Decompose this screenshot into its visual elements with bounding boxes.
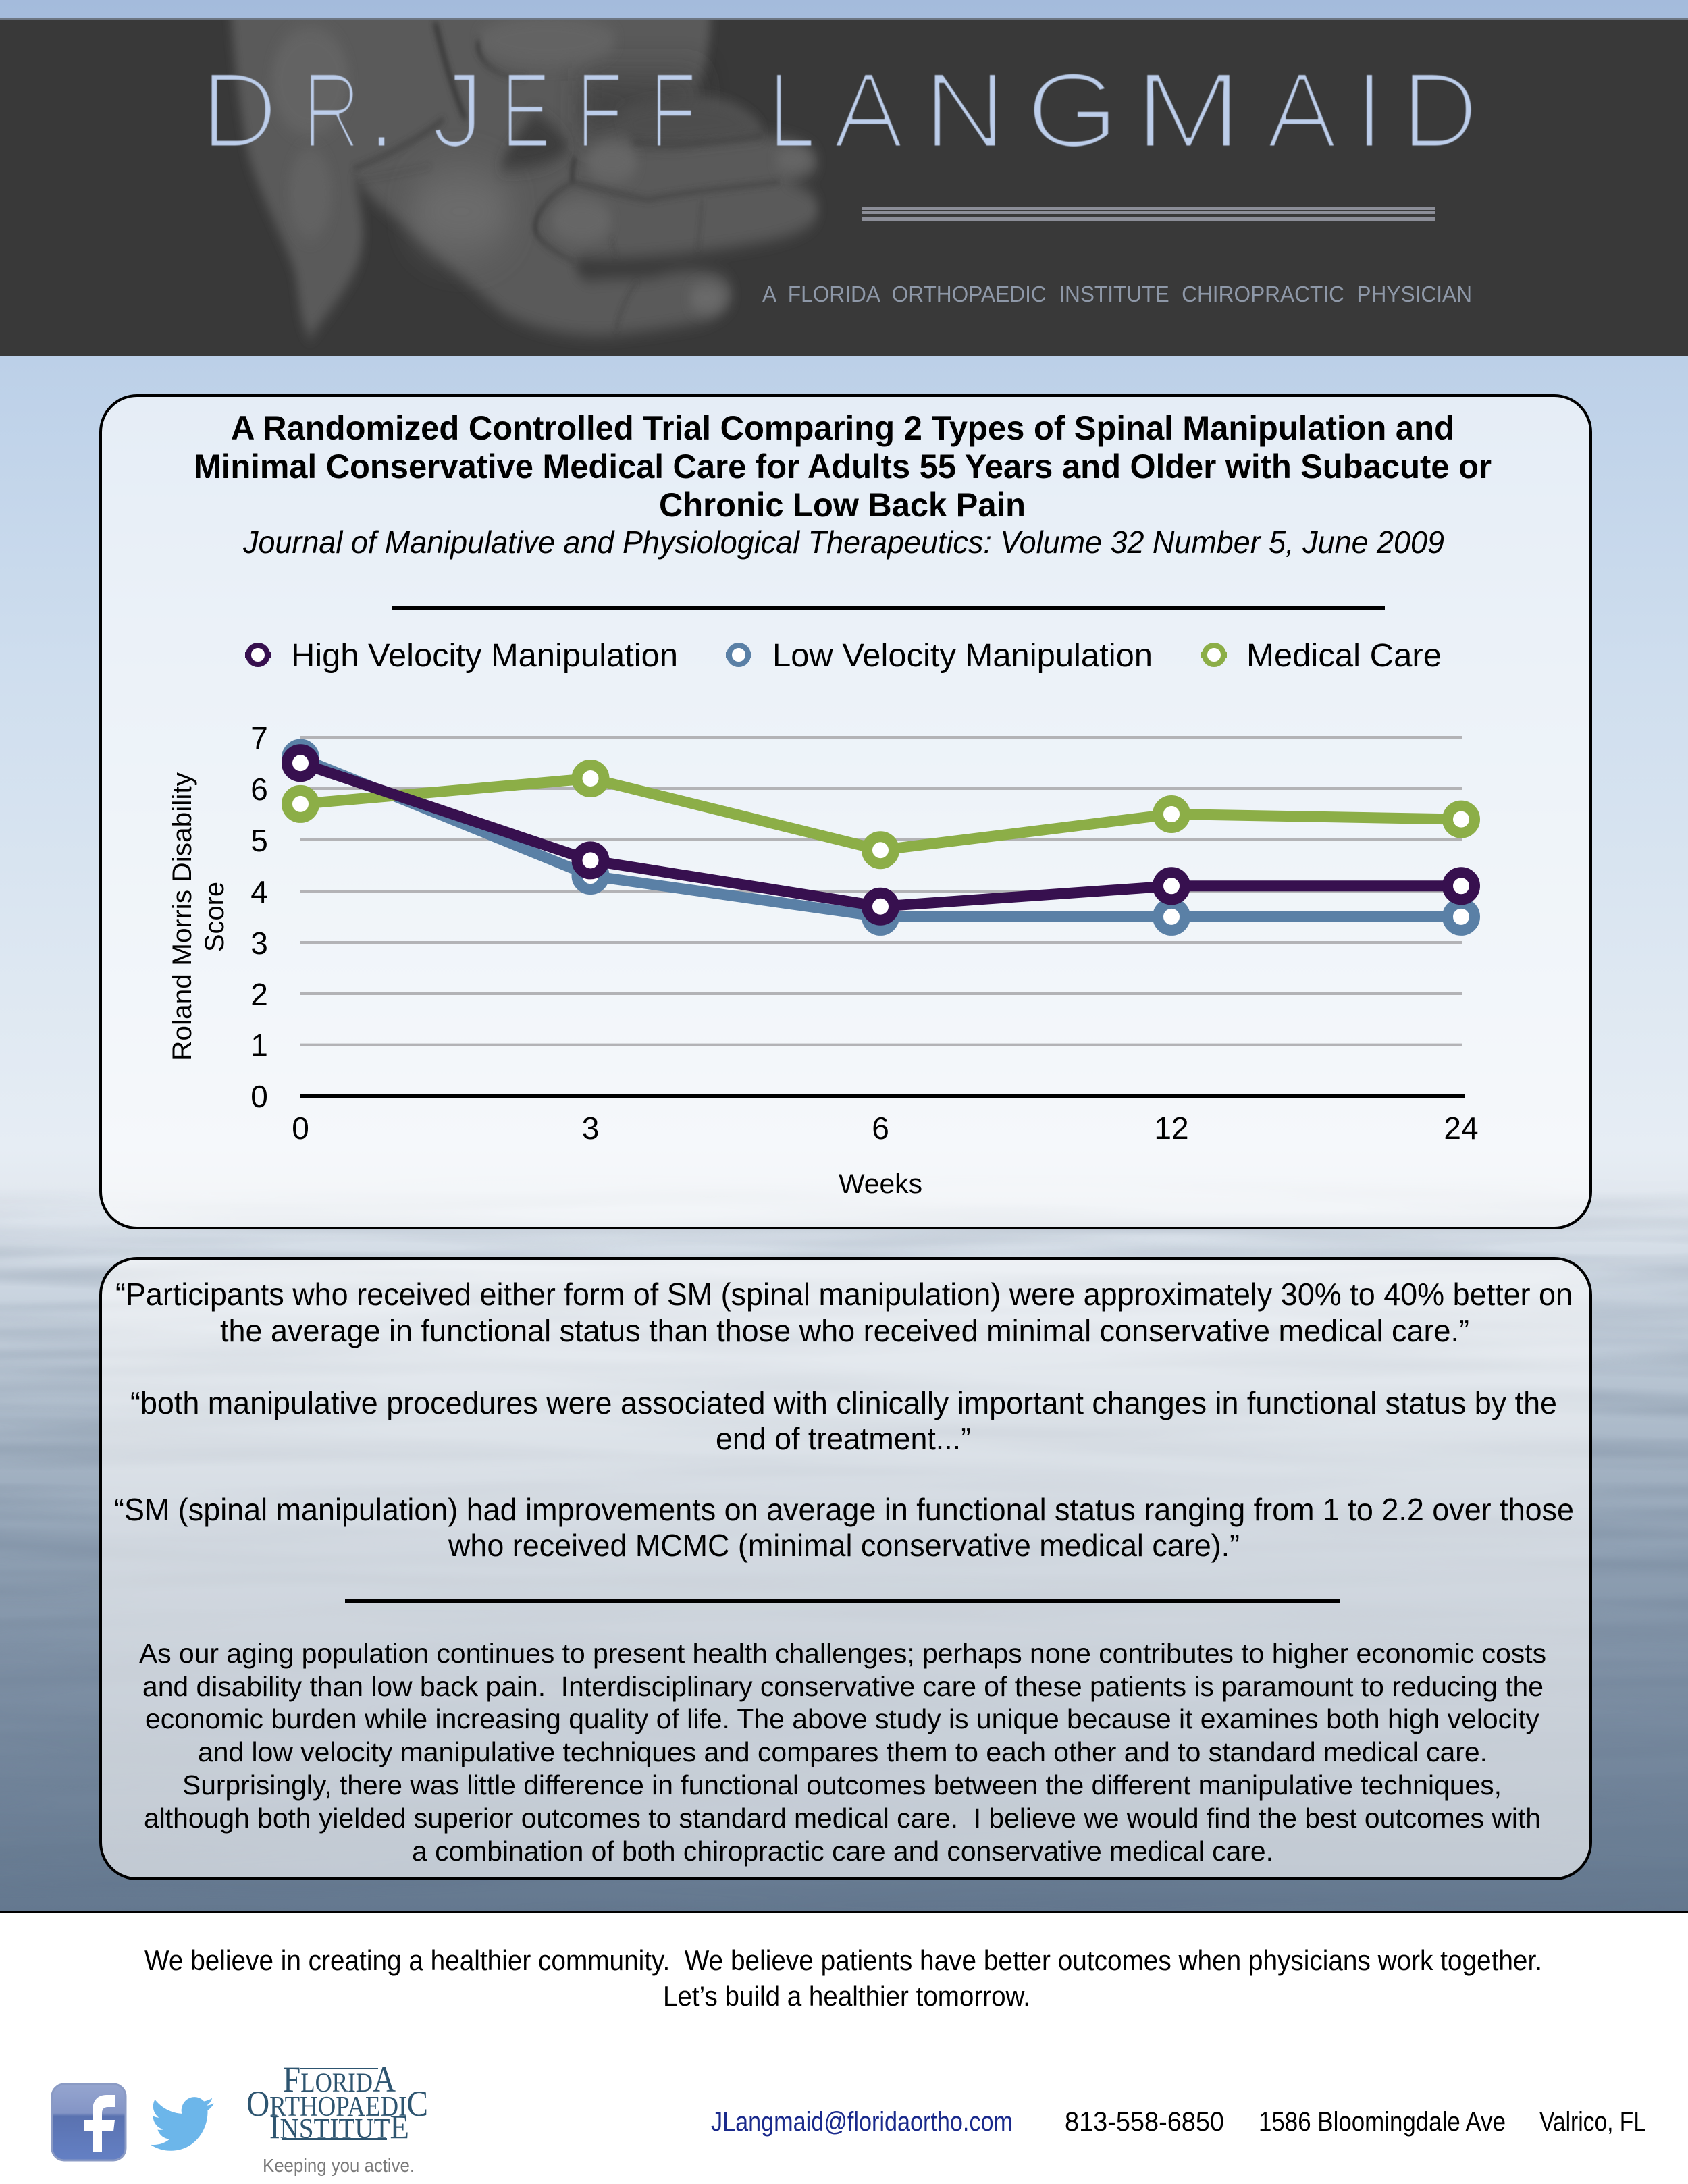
logo: Florida Orthopaedic Institute: ORTHOPAEDIC [246, 2083, 428, 2124]
study title: Chronic Low Back Pain [659, 486, 1026, 524]
header banner [0, 0, 1688, 356]
y axis labels [250, 720, 268, 1114]
study quotes: “Participants who received either form of SM (spinal manipulation) were approximately 30% to 40% better on [115, 1277, 1573, 1312]
author commentary: Surprisingly, there was little difference in functional outcomes between the different manipulative techniques, [182, 1769, 1502, 1801]
chart legend: Medical Care [1246, 638, 1442, 674]
banner name: F [575, 50, 624, 170]
y axis labels: 5 [250, 823, 268, 858]
chart legend: Low Velocity Manipulation [772, 638, 1153, 674]
series: medical care [287, 765, 1475, 863]
x axis labels: 24 [1444, 1111, 1479, 1146]
contact details: JLangmaid@floridaortho.com [711, 2107, 1013, 2137]
y axis title: Roland Morris Disability [167, 772, 197, 1061]
banner name: L [768, 50, 816, 170]
banner subtitle: A FLORIDA ORTHOPAEDIC INSTITUTE CHIROPRACTIC PHYSICIAN [762, 282, 1472, 307]
series: high velocity manipulation [287, 749, 1475, 920]
author commentary: a combination of both chiropractic care and conservative medical care. [412, 1836, 1273, 1867]
study quotes [114, 1277, 1574, 1563]
banner name: J [431, 50, 485, 170]
icon: hand photograph [228, 0, 818, 338]
banner name: F [649, 50, 697, 170]
panel: study and chart [101, 396, 1591, 1228]
chart legend: High Velocity Manipulation [291, 638, 678, 674]
logo: Florida Orthopaedic Institute: FLORIDA [283, 2059, 396, 2100]
banner name: D [1401, 50, 1479, 170]
line chart [167, 720, 1479, 1199]
study title [194, 409, 1492, 524]
x axis labels: 6 [872, 1111, 889, 1146]
study title: A Randomized Controlled Trial Comparing 2 Types of Spinal Manipulation and [231, 409, 1454, 447]
study quotes: “both manipulative procedures were associated with clinically important changes in functional status by the [130, 1385, 1557, 1420]
author commentary: As our aging population continues to present health challenges; perhaps none contributes to higher economic costs [139, 1638, 1546, 1669]
contact details: 813-558-6850 [1065, 2107, 1224, 2137]
y axis labels: 2 [250, 977, 268, 1012]
mission statement: We believe in creating a healthier community. We believe patients have better outcomes when physicians work together. [144, 1944, 1542, 1976]
icon: twitter bird [151, 2097, 214, 2151]
y axis title [167, 772, 230, 1061]
x axis labels: 0 [292, 1111, 309, 1146]
banner name: A [1266, 50, 1338, 170]
banner name: . [367, 50, 396, 170]
author commentary: and disability than low back pain. Interdisciplinary conservative care of these patients is paramount to reducing the [142, 1671, 1544, 1702]
y axis labels: 4 [250, 874, 268, 909]
journal citation: Journal of Manipulative and Physiological Therapeutics: Volume 32 Number 5, June 2009 [242, 525, 1444, 560]
y axis labels: 3 [250, 926, 268, 961]
author commentary: although both yielded superior outcomes to standard medical care. I believe we would find the best outcomes with [144, 1803, 1541, 1834]
study quotes: the average in functional status than those who received minimal conservative medical care.” [220, 1313, 1469, 1348]
study quotes: end of treatment...” [716, 1421, 971, 1456]
banner triple rule [862, 207, 1435, 221]
logo: Florida Orthopaedic Institute: Keeping you active. [263, 2155, 415, 2176]
x axis labels: 12 [1154, 1111, 1189, 1146]
study title: Minimal Conservative Medical Care for Adults 55 Years and Older with Subacute or [194, 448, 1492, 485]
banner name: I [1354, 50, 1384, 170]
x axis title: Weeks [839, 1169, 922, 1199]
banner name: E [500, 50, 552, 170]
banner name: R [302, 50, 361, 170]
mission statement [144, 1944, 1542, 2012]
contact details: 1586 Bloomingdale Ave [1259, 2107, 1506, 2137]
study quotes: “SM (spinal manipulation) had improvements on average in functional status ranging from 1 to 2.2 over those [114, 1492, 1574, 1527]
y axis title: Score [200, 882, 230, 952]
x axis labels [292, 1111, 1479, 1146]
mission statement: Let’s build a healthier tomorrow. [663, 1980, 1030, 2012]
logo: Florida Orthopaedic Institute: INSTITUTE [269, 2108, 409, 2146]
icon: facebook [52, 2084, 126, 2160]
y axis labels: 7 [250, 720, 268, 755]
y axis labels: 0 [250, 1079, 268, 1114]
banner name: A [833, 50, 904, 170]
author commentary: and low velocity manipulative techniques and compares them to each other and to standard medical care. [198, 1736, 1487, 1767]
y axis labels: 1 [250, 1028, 268, 1063]
logo: Florida Orthopaedic Institute [246, 2059, 428, 2176]
panel: quotes and commentary [101, 1258, 1591, 1879]
contact details [711, 2107, 1646, 2137]
banner name: G [1026, 50, 1119, 170]
creases [354, 21, 779, 262]
study quotes: who received MCMC (minimal conservative medical care).” [448, 1528, 1240, 1563]
series: low velocity manipulation [287, 745, 1475, 930]
y axis labels: 6 [250, 772, 268, 807]
banner name: M [1134, 50, 1242, 170]
shading layers [271, 16, 810, 331]
author commentary: economic burden while increasing quality of life. The above study is unique because it examines both high velocity [145, 1703, 1539, 1734]
author commentary [139, 1638, 1546, 1867]
banner name: N [923, 50, 1007, 170]
chart legend [245, 638, 1442, 674]
x axis labels: 3 [582, 1111, 599, 1146]
banner name: D [201, 50, 278, 170]
footer [0, 1911, 1688, 2184]
contact details: Valrico, FL [1539, 2107, 1646, 2137]
